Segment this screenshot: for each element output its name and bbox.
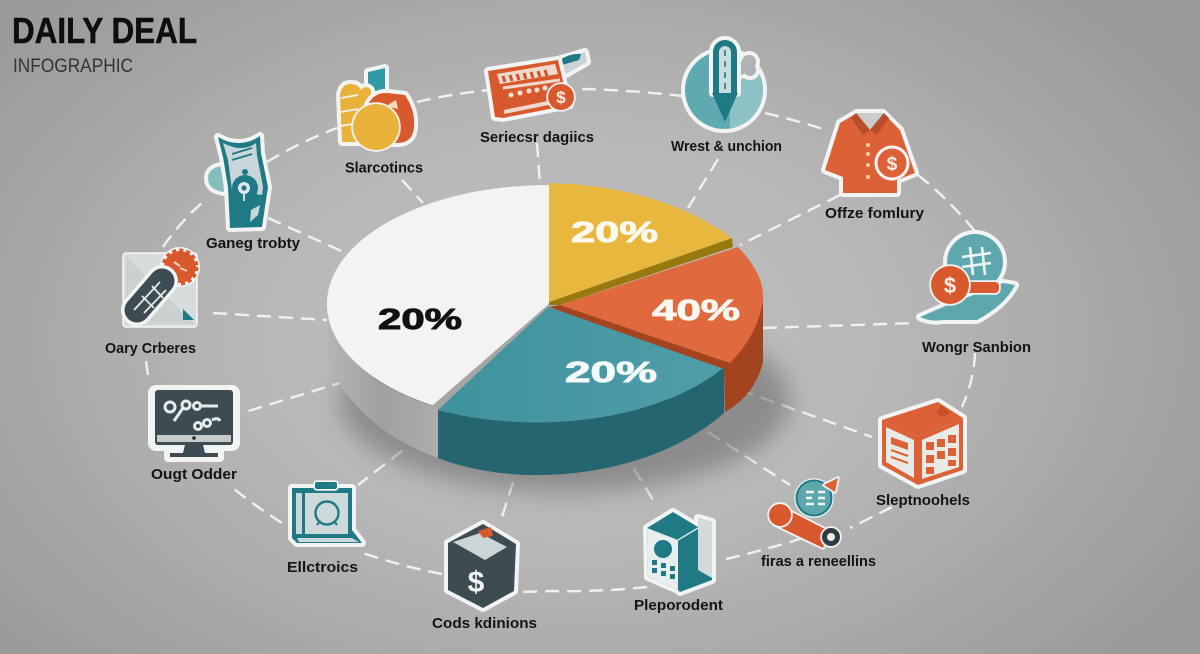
value: yellow: 20%	[571, 217, 658, 249]
slice: yellow 20%	[549, 183, 732, 302]
icon: box with dollar: $	[468, 566, 485, 599]
slice: orange 40%	[560, 247, 763, 363]
item: Pleporodent	[634, 512, 723, 614]
dashed connectors	[145, 89, 978, 592]
slice: teal 20%	[438, 307, 724, 422]
icon: document and tool	[124, 250, 197, 326]
label: Offze fomlury	[825, 205, 925, 222]
icon: pen and circle	[685, 40, 763, 129]
label: Seriecsr dagiics	[480, 129, 594, 146]
slice band: orange	[549, 305, 730, 369]
label: Ellctroics	[287, 559, 358, 576]
icon: hand with coin: $	[944, 273, 956, 298]
label: Pleporodent	[634, 597, 723, 614]
item: Offze fomlury	[825, 113, 925, 222]
slice wall: orange	[724, 293, 763, 412]
icon: calendar cube	[882, 402, 963, 485]
item: Ellctroics	[287, 482, 362, 576]
label: Ganeg trobty	[206, 235, 301, 252]
item: Ougt Odder	[148, 385, 240, 483]
item: Wongr Sanbion	[920, 234, 1031, 356]
value: teal: 20%	[565, 357, 657, 389]
item: Wrest & unchion	[671, 40, 782, 155]
item: Seriecsr dagiics	[480, 52, 594, 146]
item: Ganeg trobty	[206, 136, 301, 252]
icon: shirt with coin: $	[887, 154, 898, 175]
label: Sleptnoohels	[876, 492, 970, 509]
label: Ougt Odder	[151, 466, 237, 483]
item: firas a reneellins	[761, 478, 876, 570]
label: Oary Crberes	[105, 340, 196, 357]
slice: white 20%	[327, 185, 549, 406]
label: Slarcotincs	[345, 160, 423, 176]
slice wall: white	[327, 304, 438, 458]
icon: building	[647, 512, 712, 592]
icon: tag with gear	[208, 136, 268, 228]
item: Oary Crberes	[105, 250, 197, 357]
icon: monitor	[148, 385, 240, 462]
item: Cods kdinions	[432, 524, 537, 632]
icon: groceries	[340, 68, 414, 150]
item: Slarcotincs	[340, 68, 423, 176]
slice band: yellow	[549, 238, 733, 305]
label: firas a reneellins	[761, 553, 876, 570]
label: Wrest & unchion	[671, 138, 782, 155]
3D pie chart	[327, 183, 763, 475]
slice wall: teal	[438, 367, 724, 475]
label: Cods kdinions	[432, 615, 537, 632]
label: Wongr Sanbion	[922, 339, 1031, 356]
title: DAILY DEAL	[12, 10, 197, 51]
value: white: 20%	[378, 304, 462, 336]
item: Sleptnoohels	[876, 402, 970, 509]
icon: machine with coin: $	[556, 88, 566, 107]
icon: wrench and gauge	[769, 478, 840, 548]
title	[12, 10, 197, 77]
pie shadow	[340, 308, 790, 492]
subtitle: INFOGRAPHIC	[13, 55, 133, 77]
icon: book with clock	[292, 482, 362, 543]
value: orange: 40%	[652, 295, 740, 327]
